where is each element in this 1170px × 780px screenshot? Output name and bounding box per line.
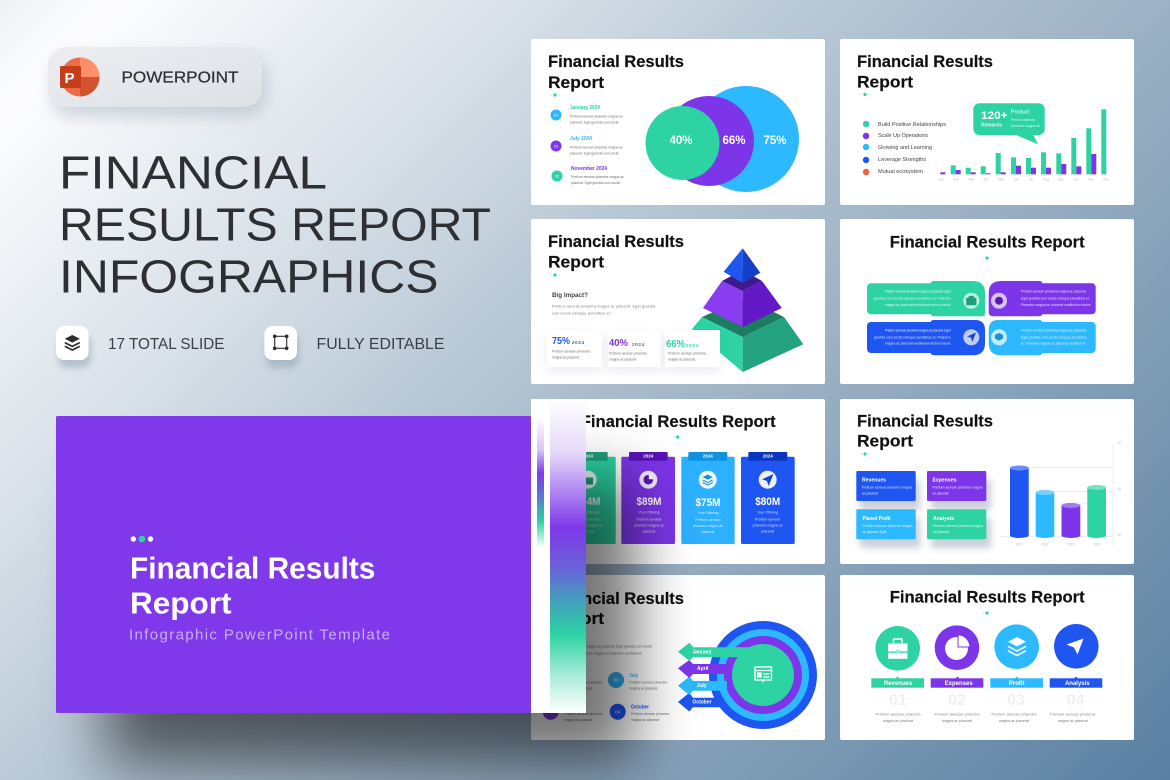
list item: 02: Pretium aenean pharetra <box>564 712 602 716</box>
step 02: expenses: magna ac placerat <box>942 719 972 723</box>
stat card: 75%: 75% <box>552 336 570 347</box>
list item: 03 July: 03 <box>613 678 619 682</box>
heading: Report <box>548 609 604 628</box>
bars <box>938 109 1109 182</box>
main title: RESULTS REPORT <box>59 199 491 251</box>
card: cyan: Your Offering <box>698 511 718 515</box>
step 02: expenses: Expenses <box>945 681 973 687</box>
step 02: expenses: 02 <box>948 692 966 709</box>
heading: Financial Results Report <box>890 232 1085 251</box>
card: blue: Pretium aenean <box>755 518 780 522</box>
heading: Financial Results <box>548 232 684 251</box>
info box: expenses: ac placerat <box>932 492 948 496</box>
list item: 02: magna ac placerat <box>564 718 592 722</box>
heading: Financial Results Report <box>581 412 776 431</box>
tab: cyan <box>989 320 1096 355</box>
heading: Report <box>857 432 913 451</box>
bars: Jan <box>938 178 944 182</box>
tab: blue: magna ac placerat vestibulum lectus mauris <box>885 342 951 346</box>
venn circles <box>646 86 799 192</box>
tab: teal: Pretium aenean pharetra magna ac placerat. Eget <box>885 290 951 294</box>
info box: revenues: ac placerat <box>862 492 878 496</box>
list item: 01: Pretium aenean pharetra <box>564 680 602 684</box>
info box: analysis <box>927 509 991 548</box>
target rings <box>678 621 817 729</box>
stat card: 66%: 66% <box>666 339 685 350</box>
badge: PowerPoint <box>48 47 266 116</box>
pyramid <box>692 248 803 372</box>
callout: 120+ rewards: Rewards <box>981 122 1002 128</box>
card: teal: pharetra magna ac <box>573 524 603 528</box>
tab: purple: Pharetra magna ac placerat vestibulum lectus <box>1021 303 1091 307</box>
cover heading <box>130 550 375 620</box>
feature: fully editable <box>264 326 444 368</box>
card: purple <box>621 452 675 544</box>
bars: Apr <box>984 178 989 182</box>
list item: 02 <box>543 704 602 722</box>
stat card: 40%: 2024 <box>632 342 644 347</box>
tab: cyan: et. Pharetra magna ac placerat vestibulum <box>1021 342 1086 346</box>
slide 8: four steps <box>840 575 1134 740</box>
gradient strip <box>531 399 586 713</box>
heading <box>548 232 684 272</box>
numbered list: Mutual ecosystem <box>878 169 923 175</box>
intro text: Pretium aenean pharetra magna ac placerat. Eget gravida cum sociis <box>548 644 652 648</box>
list item: 01: magna ac placerat <box>564 686 592 690</box>
info box: expenses: Pretium aenean pharetra magna <box>932 486 982 490</box>
list item: 03 July: Pretium aenean pharetra <box>629 680 667 684</box>
feature: 17 total slide: 17 TOTAL SLIDE <box>108 336 224 353</box>
bars: Sep <box>1058 178 1064 182</box>
stat card: 66% <box>665 330 720 367</box>
card: blue: pharetra magna ac <box>753 524 783 528</box>
numbered list: Leverage Strengths <box>878 157 926 163</box>
step 04: analysis <box>1050 624 1102 723</box>
timeline list <box>550 105 624 185</box>
icon: PowerPoint logo <box>60 58 100 96</box>
venn circles: 40% <box>669 135 693 147</box>
card: purple: Your Offering <box>639 510 659 514</box>
step 01: revenues <box>871 626 924 723</box>
info box: revenues: Pretium aenean pharetra magna <box>862 486 912 490</box>
info box: analysis: Analysis <box>933 516 954 522</box>
step 03: profit: Profit <box>1009 681 1025 687</box>
cover subtitle: Infographic PowerPoint Template <box>129 626 390 643</box>
list item: 04 October <box>610 704 669 722</box>
step 02: expenses: Pretium aenean pharetra <box>934 712 980 716</box>
step 01: revenues: Pretium aenean pharetra <box>876 712 920 716</box>
card: purple: Pretium aenean <box>636 518 662 522</box>
card: teal: Pretium aenean <box>575 518 601 522</box>
info box: expenses <box>927 471 991 510</box>
card: purple: placerat <box>643 530 655 534</box>
heading: Report <box>857 72 913 92</box>
stat card: 75% <box>547 330 602 367</box>
bars: Mar <box>968 178 975 182</box>
stat card: 75%: 2024 <box>572 340 584 345</box>
stat card: 75%: magna ac placerat. <box>552 356 580 360</box>
list item: 04 October: 04 <box>615 709 621 714</box>
card: teal: $94M <box>576 496 600 508</box>
feature: 17 total slide <box>56 326 224 368</box>
arrow: October: October <box>692 700 712 706</box>
timeline list: July 2024 <box>570 136 592 142</box>
heading <box>857 52 993 92</box>
timeline list: January 2024 <box>570 105 600 111</box>
slide 4: four tabs <box>840 219 1134 384</box>
info box: planed profit: Pretium aenean pharetra magna <box>862 524 912 528</box>
list item: 04 October: magna ac placerat <box>631 718 659 722</box>
bars: Nov <box>1088 178 1094 182</box>
cylinder chart: 75 <box>1117 441 1121 445</box>
card: purple: 2024 <box>643 454 654 459</box>
timeline list: 03 <box>554 144 559 148</box>
intro text: Pretium aenean pharetra magna ac placerat. Eget gravida <box>552 304 655 308</box>
main title: FINANCIAL <box>59 146 327 198</box>
step 01: revenues: 01 <box>889 692 907 709</box>
list item: 03 July <box>608 672 667 690</box>
badge: PowerPoint: POWERPOINT <box>122 70 239 87</box>
timeline list: Pretium aenean pharetra magna ac <box>570 146 623 150</box>
main title <box>59 146 491 303</box>
cylinder chart <box>1000 441 1121 547</box>
callout: 120+ rewards: pharetra magna ac <box>1011 124 1040 128</box>
card: teal <box>561 452 616 544</box>
card: cyan: placerat <box>702 530 714 534</box>
card: cyan <box>681 452 735 544</box>
tab: blue: Pretium aenean pharetra magna ac placerat. Eget <box>885 329 951 333</box>
tab: teal: magna ac placerat vestibulum lectus mauris <box>885 303 951 307</box>
info box: planed profit: ac placerat. Eget <box>862 530 886 534</box>
drop shadow of cover slide <box>105 480 635 765</box>
stat card: 66%: magna ac placerat. <box>668 358 696 362</box>
step 03: profit <box>990 624 1043 723</box>
tab: cyan: Eget gravida cum sociis natoque penatibus <box>1021 335 1087 339</box>
list item: 03 July: July <box>629 673 638 679</box>
icon: presentation <box>755 667 772 682</box>
timeline list: placerat. Eget gravida cum sociis <box>570 120 619 124</box>
stat card: 66%: Pretium aenean pharetra <box>668 352 706 356</box>
info box: revenues: Revenues <box>862 477 886 483</box>
cover slide: purple panel <box>56 416 531 713</box>
card: cyan: 2024 <box>703 454 713 459</box>
heading: Report <box>548 252 604 272</box>
intro text <box>552 292 655 316</box>
tab: cyan: Pretium aenean pharetra magna ac placerat. <box>1021 329 1087 333</box>
tab: purple: Eget gravida cum sociis natoque penatibus et. <box>1021 296 1090 300</box>
heading: Financial Results Report <box>890 587 1085 606</box>
tab: purple: Pretium aenean pharetra magna ac placerat. <box>1021 290 1087 294</box>
info box: analysis: Pretium aenean pharetra magna <box>933 524 983 528</box>
intro text: cum sociis natoque penatibus et. <box>552 312 611 316</box>
numbered list: Growing and Learning <box>878 145 932 151</box>
info box: planed profit <box>856 509 920 548</box>
cover heading: Financial Results <box>130 550 375 585</box>
numbered list: Build Positive Relationships <box>878 122 946 128</box>
card: teal: 2024 <box>583 454 594 459</box>
intro text: natoque penatibus pharetra magna ac placerat vestibulum <box>548 652 642 656</box>
info box: revenues <box>856 471 920 510</box>
list item: 04 October: Pretium aenean pharetra <box>631 712 669 716</box>
card: blue: placerat <box>761 530 774 534</box>
tab: purple <box>989 281 1096 316</box>
icon: PowerPoint logo: P <box>64 70 75 87</box>
tab: blue: gravida cum sociis natoque penatibus et. Pharetra <box>874 335 951 339</box>
slide 2: bar chart <box>840 39 1134 205</box>
feature: fully editable: FULLY EDITABLE <box>316 336 444 353</box>
tab: teal <box>867 281 985 316</box>
callout: 120+ rewards: Pretium aenean <box>1011 118 1035 122</box>
stat card: 40%: Pretium aenean pharetra <box>609 352 647 356</box>
info box: planed profit: Planed Profit <box>862 516 891 522</box>
heading: Financial Results <box>857 412 993 431</box>
slide 6: cylinder chart <box>840 399 1134 564</box>
stat card: 40%: 40% <box>609 338 628 349</box>
cylinder chart: 2022 <box>1015 542 1023 546</box>
arrow: April: April <box>697 666 709 672</box>
cylinder chart: 2024 <box>1093 542 1101 546</box>
list item: 01 <box>543 672 602 690</box>
timeline list: 01 <box>554 112 559 118</box>
heading <box>857 412 993 451</box>
slide 1: venn diagram <box>531 39 825 205</box>
callout: 120+ rewards <box>973 103 1045 144</box>
bars: Jun <box>1013 178 1019 182</box>
heading: Financial Results <box>548 589 684 608</box>
bars: Oct <box>1074 178 1079 182</box>
slide 7: target with arrows <box>531 575 825 740</box>
stat card: 40% <box>608 330 661 367</box>
card: blue <box>741 452 795 544</box>
stat card: 40%: magna ac placerat. <box>609 358 637 362</box>
stat card: 66%: 2024 <box>686 343 698 348</box>
numbered list <box>863 121 946 175</box>
bars: Aug <box>1043 178 1049 182</box>
arrow: July: July <box>697 683 707 689</box>
heading: Financial Results <box>857 52 993 71</box>
info box: analysis: ac placerat <box>933 530 949 534</box>
step 04: analysis: Analysis <box>1065 681 1090 687</box>
intro text <box>548 644 652 656</box>
step 03: profit: magna ac placerat <box>999 719 1029 723</box>
info box: expenses: Expenses <box>932 477 956 483</box>
arrow: January: January <box>692 649 712 655</box>
heading <box>548 589 684 628</box>
tab: teal: gravida cum sociis natoque penatibus et. Pharetra <box>874 296 951 300</box>
timeline list: 02 <box>555 174 560 178</box>
venn circles: 66% <box>722 135 746 147</box>
step 03: profit: 03 <box>1007 692 1025 709</box>
step 04: analysis: magna ac placerat <box>1058 719 1088 723</box>
card: blue: 2024 <box>763 454 773 459</box>
card: cyan: Pretium aenean <box>695 518 721 522</box>
heading: Report <box>548 73 604 92</box>
numbered list: Scale Up Operations <box>878 133 928 139</box>
cylinder chart: 50 <box>1117 487 1121 491</box>
intro text: Big Impact? <box>552 292 588 299</box>
step 02: expenses <box>931 625 983 723</box>
timeline list: Pretium aenean pharetra magna ac <box>571 175 624 179</box>
step 04: analysis: 04 <box>1067 692 1085 709</box>
cylinder chart: 2021 <box>1041 542 1049 546</box>
bars: May <box>998 178 1004 182</box>
cylinder chart: 25 <box>1117 533 1121 537</box>
callout: 120+ rewards: 120+ <box>981 110 1008 122</box>
timeline list: placerat. Eget gravida cum sociis <box>571 181 620 185</box>
step 01: revenues: magna ac placerat <box>883 719 913 723</box>
card: purple: pharetra magna ac <box>634 524 664 528</box>
tab: blue <box>867 320 985 355</box>
cover heading: Report <box>130 585 232 620</box>
card: teal: Your Offering <box>578 510 598 514</box>
timeline list: November 2024 <box>571 166 607 172</box>
card: cyan: pharetra magna ac <box>693 524 723 528</box>
card: blue: $80M <box>755 496 780 508</box>
bars: Feb <box>953 178 959 182</box>
card: teal: placerat <box>582 530 594 534</box>
bars: Dec <box>1103 178 1109 182</box>
step 01: revenues: Revenues <box>884 681 913 687</box>
timeline list: placerat. Eget gravida cum sociis <box>570 152 619 156</box>
card: cyan: $75M <box>696 497 720 509</box>
step 03: profit: Pretium aenean pharetra <box>992 712 1036 716</box>
heading <box>548 52 684 92</box>
heading: Financial Results <box>548 52 684 71</box>
cylinder chart: 2023 <box>1067 542 1075 546</box>
bars: Jul <box>1029 178 1033 182</box>
card: blue: Your Offering <box>757 510 778 514</box>
slide 3: pyramid <box>531 219 825 384</box>
step 04: analysis: Pretium aenean pharetra <box>1050 712 1095 716</box>
callout: 120+ rewards: Product <box>1011 110 1030 116</box>
timeline list: Pretium aenean pharetra magna ac <box>570 114 623 118</box>
venn circles: 75% <box>763 135 787 147</box>
card: purple: $89M <box>636 496 662 508</box>
main title: INFOGRAPHICS <box>59 251 438 303</box>
stat card: 75%: Pretium aenean pharetra <box>552 350 590 354</box>
list item: 03 July: magna ac placerat <box>629 686 657 690</box>
list item: 04 October: October <box>631 704 649 710</box>
slide 5: pricing cards <box>531 399 825 564</box>
pagination dots <box>131 536 153 542</box>
